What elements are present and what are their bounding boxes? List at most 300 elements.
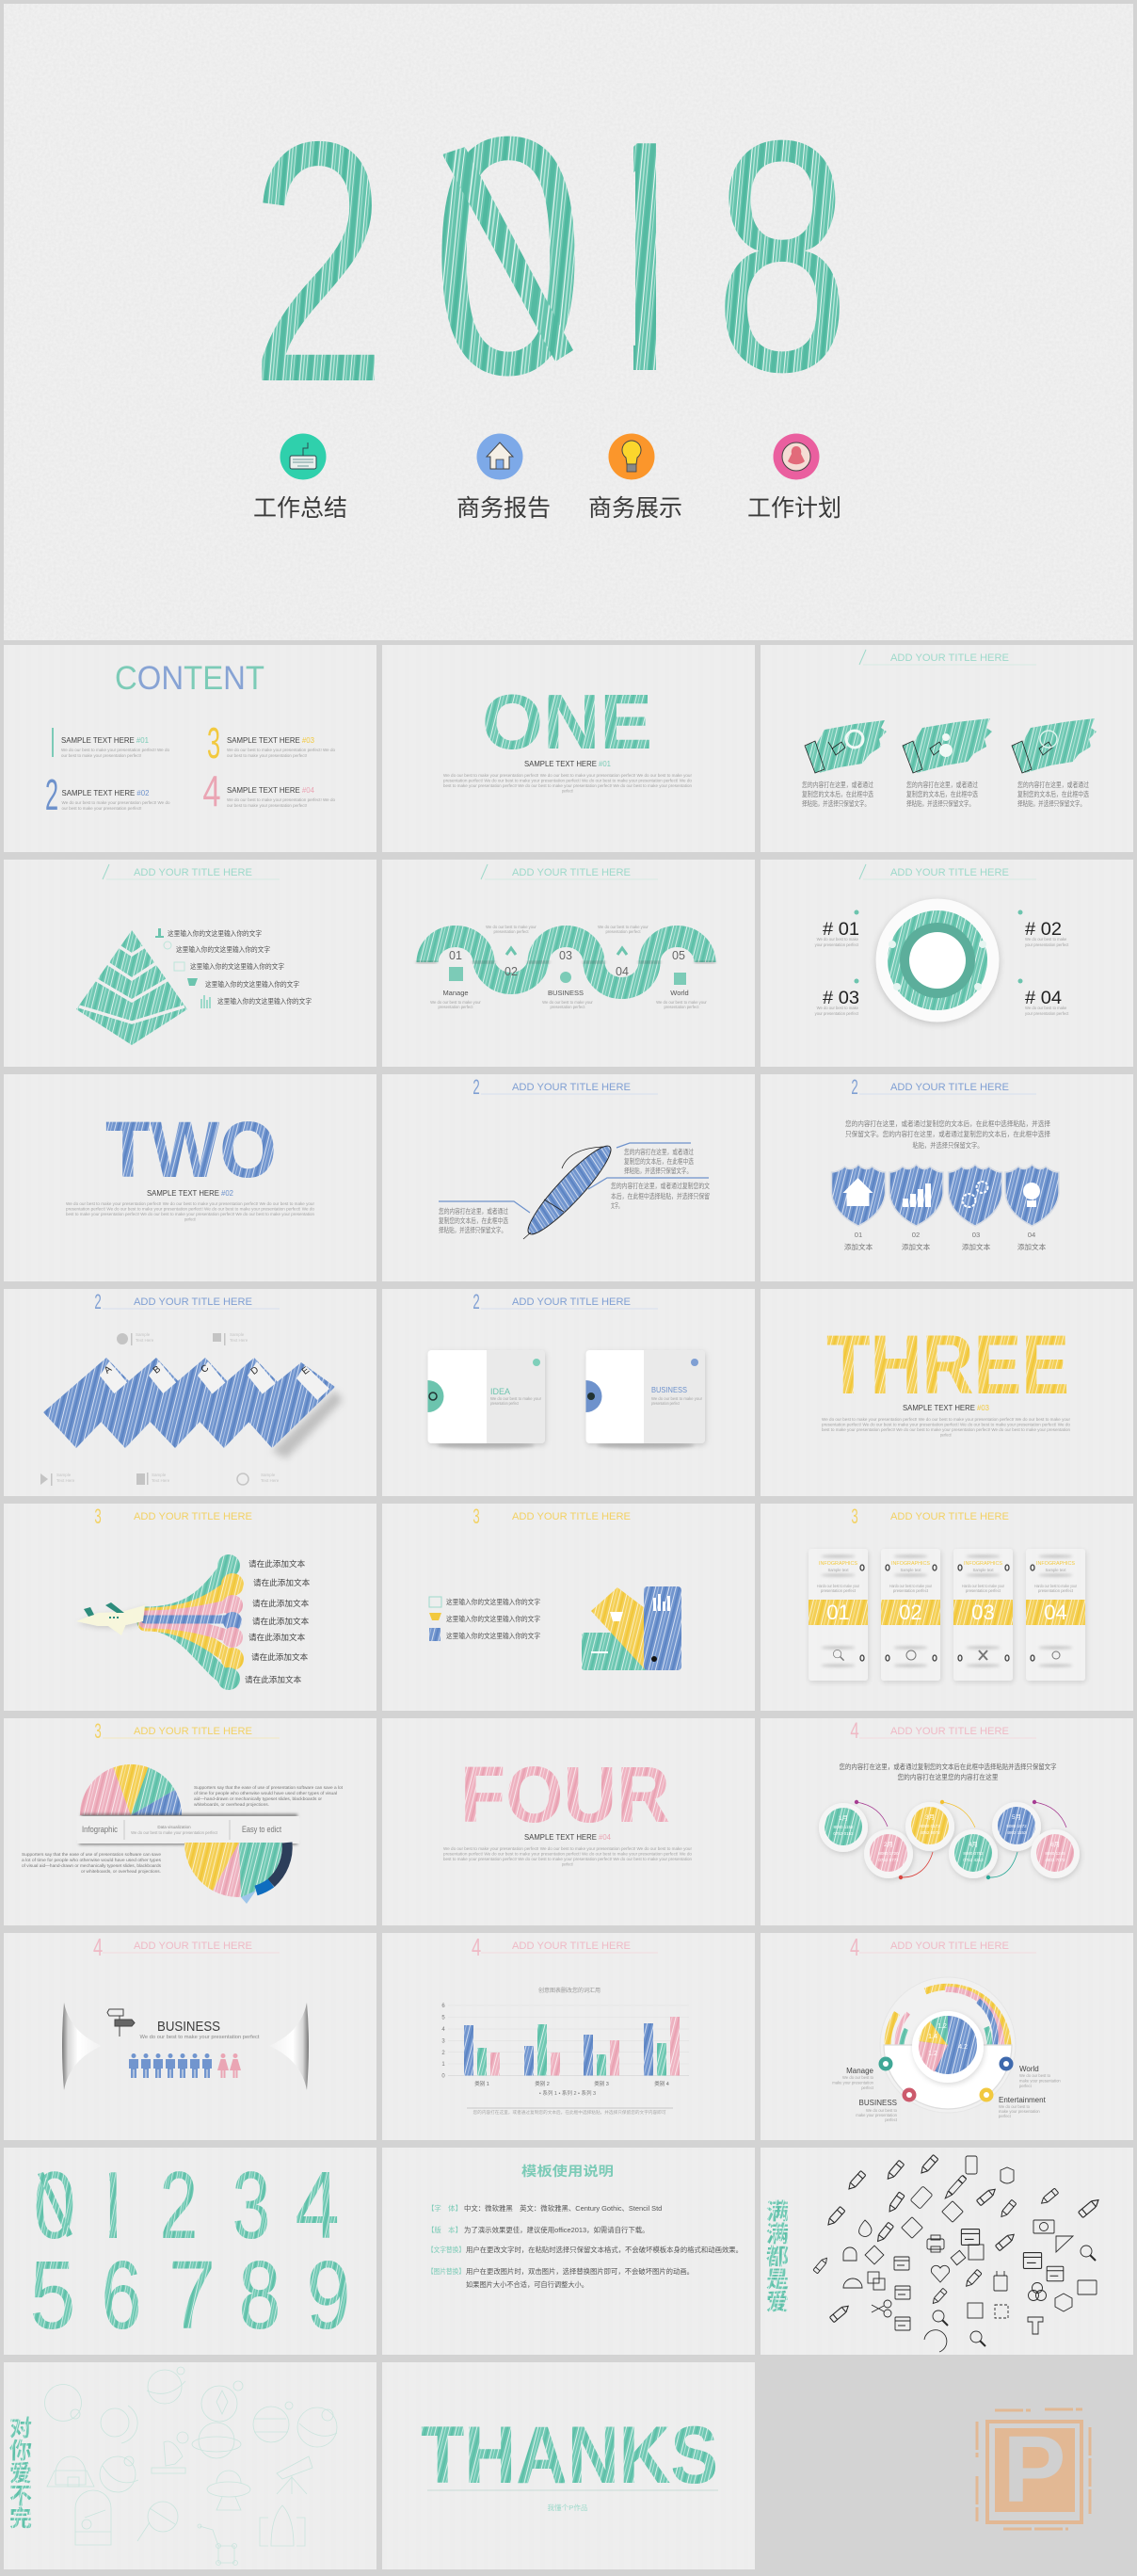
vertical slogan: 你 [9,2439,32,2464]
grid and axis labels: 5 [441,2015,445,2021]
circle: 3月: 4052 0072 [920,1830,940,1835]
item 02: We do our best to make your presentation perfect! We do [62,800,170,805]
outer halo [880,1977,1016,2113]
diamond D: D [249,1365,261,1377]
circle: 2月: 0752 5772 [878,1858,899,1862]
bottom text [22,1852,162,1875]
item #01: # 01 [823,920,859,940]
header [850,1718,1036,1744]
digits row 2: 6 [102,2242,141,2350]
line: 图片替换: 【图片替换】 [427,2267,465,2276]
header: ADD YOUR TITLE HERE [890,1511,1009,1522]
panel: section TWO [4,1074,376,1281]
text column 3 [1017,781,1089,808]
callout text middle: 文字。 [611,1201,622,1210]
bottom half plate [884,2045,1012,2109]
pyramid labels [168,928,312,1006]
text column 1: 复制您的文本后，在此框中选 [802,790,873,798]
column 04 [1026,1549,1085,1681]
header: ADD YOUR TITLE HERE [134,867,252,878]
card: BUSINESS [585,1350,705,1449]
grid and axis labels: 4 [441,2027,445,2033]
category labels: 类别 2 [535,2080,550,2087]
item 02: 2 [45,770,58,819]
fan labels [245,1558,311,1684]
panel: pen callouts [382,1074,755,1281]
label BUSINESS [856,2099,898,2122]
header [103,864,280,879]
binder rings [860,1565,1034,1661]
shield labels: 03 [972,1231,980,1239]
small captions: We do our best to make your [656,1000,707,1005]
heading: THANKS: THANKS [421,2410,718,2501]
digits row 2: 7 [168,2241,216,2349]
header: ADD YOUR TITLE HERE [512,1296,631,1308]
panel: plane fan [4,1504,376,1711]
petal heads [217,1554,244,1690]
paragraph: perfect! [562,789,573,793]
label World: make your presentation [1019,2079,1061,2083]
panel: section FOUR [382,1718,755,1925]
item #02: your presentation perfect [1025,942,1069,947]
circle: 5月: 4802 1152 [1007,1830,1027,1835]
text column 2: 您的内容打在这里，或者通过 [906,781,978,789]
item #03: # 03 [823,989,859,1008]
callout text middle: 您的内容打在这里，或者通过复制您的文 [611,1182,710,1190]
shield 1 house [832,1165,885,1226]
circle: 4月 [949,1829,998,1878]
intro paragraph: 只保留文字。您的内容打在这里，或者通过复制您的文本后，在此框中选择 [845,1130,1051,1138]
diamond shadow [272,1391,343,1458]
diamond A: A [103,1364,114,1377]
callout lines [439,1143,709,1213]
label Entertainment: Entertainment [999,2096,1047,2104]
header [859,650,1036,665]
step labels: Manage [442,989,469,997]
paragraph [66,1201,315,1222]
panel: infographic columns [761,1504,1133,1711]
header [481,864,658,879]
callout text middle [611,1182,710,1210]
intro text [840,1762,1057,1781]
column 02: INFOGRAPHICS [891,1561,931,1567]
line: 版本: 为了演示效果更佳，建议使用office2013，如需请自行下载。 [464,2226,649,2234]
small captions [430,925,707,1009]
bottom gray labels: Text Here [261,1478,280,1483]
label Entertainment [999,2096,1047,2118]
panel: wave flow [382,860,755,1067]
column 01: presentation perfect [821,1588,857,1593]
header: ADD YOUR TITLE HERE [890,1940,1009,1952]
panel: digits [4,2148,376,2355]
digits row 1 [36,2171,337,2239]
paragraph: best to make your presentation perfect! We do our best to make your presentation perfect! We do our best to make your presentation [443,1857,693,1861]
callout text top: 择粘贴，并选择只保留文字。 [624,1167,692,1175]
step numbers: 01 [449,949,462,962]
paragraph [443,773,693,793]
digits row 1: 4 [295,2152,340,2259]
icon: house [476,433,523,480]
small captions: We do our best to make your [430,1000,481,1005]
center strip: Data visualization [157,1825,191,1829]
circle: 3月: 3月 [925,1813,935,1821]
digits row 2: 5 [30,2241,75,2350]
top half pie [80,1764,182,1815]
tool icon cloud [813,2155,1100,2352]
grid and axis labels: 0 [441,2073,445,2079]
ring [875,898,1000,1023]
top gray labels: Sample [230,1332,245,1337]
pyramid labels: 这里输入你的文这里输入你的文字 [168,928,262,938]
label Manage: perfect [861,2085,874,2090]
circle: 2月 [864,1829,913,1878]
item 03 [207,718,336,767]
people blue [129,2053,212,2078]
intro text: 您的内容打在这里您的内容打在这里 [898,1772,999,1781]
panel: ring diagram [761,860,1133,1067]
line: 文字替换: 【文字替换】 [427,2246,465,2254]
column 04: INFOGRAPHICS [1036,1561,1076,1567]
pen illustration [520,1138,618,1242]
header: ADD YOUR TITLE HERE [134,1296,252,1308]
item #04 [1018,979,1069,1016]
fan labels: 请在此添加文本 [251,1651,309,1662]
intro paragraph: 粘贴，并选择只保留文字。 [913,1141,983,1150]
text column 2: 复制您的文本后，在此框中选 [906,790,978,798]
step labels: BUSINESS [548,989,584,997]
logo: P stamp: P [1003,2417,1065,2522]
line: 字体: 【字 体】 [427,2204,462,2213]
circle: 5月 [992,1802,1041,1851]
grid and axis labels: 6 [441,2004,445,2009]
bottom gray labels: Sample [152,1473,167,1477]
vertical slogan: 爱 [766,2290,789,2315]
top text: whiteboards, or overhead projections. [194,1802,269,1808]
small captions: We do our best to make your [486,925,536,929]
item 01: We do our best to make your presentation perfect! We do [61,748,170,752]
category labels: 类别 3 [594,2080,609,2087]
paragraph [443,1846,693,1866]
panel: section THREE [761,1289,1133,1496]
center pie: 1.2 [937,2023,947,2030]
callout text middle: 本后，在此框中选择粘贴，并选择只保留 [611,1192,710,1200]
heading: CONTENT: CONTENT [115,660,264,697]
digits row 2 [30,2240,350,2350]
pyramid labels: 这里输入你的文这里输入你的文字 [190,961,284,971]
text column 1: 您的内容打在这里，或者通过 [802,781,873,789]
text column 1: 择粘贴，并选择只保留文字。 [802,799,870,808]
top text: Supporters say that the ease of use of presentation software can save a lot [194,1785,344,1791]
footnote rule [467,2107,673,2109]
header: ADD YOUR TITLE HERE [890,1082,1009,1093]
header: 3 [94,1720,102,1743]
bars group 3 [584,2035,619,2075]
step numbers: 04 [616,965,629,978]
header: 2 [472,1076,480,1099]
diamond E: E [300,1365,312,1377]
header: ADD YOUR TITLE HERE [512,1511,631,1522]
bottom text: Supporters say that the ease of use of presentation software can save [22,1852,161,1858]
fan labels: 请在此添加文本 [248,1558,306,1569]
item 01: our best to make your presentation perfect! [61,753,141,758]
line: 图片替换 [427,2267,694,2289]
title: 2018 hatched year: 0 [431,66,585,445]
shield labels: 01 [855,1231,862,1239]
item 04: We do our best to make your presentation perfect! We do [227,797,336,802]
callout text bottom: 复制您的文本后，在此框中选 [439,1216,508,1225]
column 01: 01 [826,1601,850,1624]
center pie: 1.4 [928,2034,937,2040]
heading: BUSINESS [157,2019,220,2035]
line: 版本: 【版 本】 [427,2226,462,2234]
label Manage: Manage [846,2067,874,2075]
paragraph: perfect! [562,1862,573,1866]
column 03: presentation perfect [966,1588,1001,1593]
column 01: INFOGRAPHICS [819,1561,858,1567]
item 02 [45,770,170,819]
shield labels: 添加文本 [844,1242,873,1251]
bars group 4 [644,2017,680,2075]
diamond C [141,1358,232,1448]
center pie: 1.2 [928,2051,937,2057]
text column 3: 复制您的文本后，在此框中选 [1017,790,1089,798]
yellow card [591,1587,645,1669]
header [472,1076,658,1099]
shield 4 bulb [1005,1165,1059,1226]
digits row 1: 0 [34,2152,75,2259]
item 01: SAMPLE TEXT HERE #01 [61,736,150,745]
chart title: 创意图表删改您的词汇用 [538,1987,601,1994]
text column 2 [906,781,978,808]
diamond B [92,1358,184,1448]
item 04 [202,766,336,815]
pyramid icons [155,928,210,1008]
step numbers: 05 [672,949,685,962]
subtitle: SAMPLE TEXT HERE #02 [147,1189,234,1198]
label BUSINESS: perfect [885,2117,898,2122]
bottom text: of visual aid—hand-drawn or mechanically typeset slides, blackboards [22,1863,162,1869]
header: 2 [472,1291,480,1313]
icon: light bulb [608,433,655,480]
item #03 [815,979,859,1016]
digits row 1: 1 [92,2151,132,2258]
center strip: Easy to edict [242,1825,281,1834]
bottom text: a lot of time for people who otherwise would have used other types [22,1858,162,1863]
item 03: our best to make your presentation perfect! [227,753,307,758]
grid and axis labels: 1 [441,2062,445,2068]
top gray labels: Text Here [230,1338,248,1343]
column 03: Hardo our best to make your [962,1584,1005,1588]
bars group 1 [464,2025,500,2075]
label Manage [832,2067,874,2090]
title: 2018 hatched year [262,136,840,380]
panel: section ONE [382,645,755,852]
panel: cards list [382,1504,755,1711]
pyramid labels: 这里输入你的文这里输入你的文字 [205,979,299,989]
digits row 1: 2 [160,2151,198,2259]
bottom gray labels: Text Here [56,1478,75,1483]
card: IDEA: presentation perfect [490,1401,520,1406]
column 02: Sample text [900,1568,921,1572]
item #04: your presentation perfect [1025,1011,1069,1016]
intro paragraph: 您的内容打在这里，或者通过复制您的文本后，在此框中选择粘贴，并选择 [845,1119,1051,1128]
label Entertainment: We do our best to [999,2104,1031,2109]
paragraph: perfect! [184,1216,196,1222]
paragraph: presentation perfect! We do our best to make your presentation perfect! We do our best to make your presentation perfect! We do [822,1422,1071,1427]
category labels [474,2080,669,2087]
paragraph: best to make your presentation perfect! We do our best to make your presentation perfect! We do our best to make your presentation [822,1427,1071,1432]
category labels: 类别 4 [654,2080,669,2087]
item #01 [815,910,859,947]
paragraph: We do our best to make your presentation perfect! We do our best to make your presentation perfect! We do our best to make your [443,1846,693,1851]
top text [194,1785,344,1808]
vertical slogan: 对 [9,2416,32,2441]
header: 2 [94,1291,102,1313]
heading: TWO: TWO [105,1105,277,1194]
center strip: We do our best to make your presentation perfect [131,1830,218,1835]
item 01 [52,728,170,758]
step numbers: 03 [559,949,572,962]
bottom text: or whiteboards, or overhead projections. [81,1869,161,1875]
header: 3 [94,1505,102,1528]
vertical slogan: 不 [9,2484,32,2509]
label BUSINESS: make your presentation [856,2113,898,2117]
circle: 1月: 0752 0152 [833,1831,854,1836]
circle: 5月: 5月 [1012,1813,1021,1821]
column 04: Hardo our best to make your [1034,1584,1078,1588]
paragraph: presentation perfect! We do our best to make your presentation perfect! We do our best to make your presentation perfect! We do [66,1207,315,1211]
item #03: We do our best to make [817,1006,859,1010]
item 03: 3 [207,718,220,767]
panel: cover slide [4,4,1133,640]
step numbers: 02 [504,965,518,978]
circle: 1月: 1月 [839,1814,848,1822]
card: IDEA: IDEA [490,1387,510,1396]
bottom gray labels [40,1473,280,1486]
panel: space icons [4,2362,376,2569]
line: 字体: 中文：微软雅黑 英文：微软雅黑、Century Gothic、Stencil Std [464,2204,662,2213]
diamond B: B [152,1364,163,1377]
header [94,1505,252,1528]
digits row 1: 3 [232,2151,270,2259]
step labels: World [670,989,689,997]
circle: 3月: 8080 0172 [920,1824,940,1828]
header: ADD YOUR TITLE HERE [134,1511,252,1522]
circle: 6月 [1031,1829,1080,1878]
label World [1019,2065,1061,2088]
paragraph: best to make your presentation perfect! We do our best to make your presentation perfect! We do our best to make your presentation [443,783,693,788]
tagline: We do our best to make your presentation perfect [139,2035,260,2040]
panel: thanks [382,2362,755,2569]
callout text top: 您的内容打在这里，或者通过 [624,1148,694,1156]
circle: 4月: 0752 4212 [963,1858,984,1862]
step icons [449,967,686,985]
footnote: 您的内容打在这里，或者通过复制您的文本后，在此框中选择粘贴，并选择只保留您的文字内容即可 [472,2109,666,2116]
line: 图片替换: 用户在更改图片时，双击图片，选择替换图片即可，不会破坏图片的动画。 [466,2267,694,2276]
header: ADD YOUR TITLE HERE [890,867,1009,878]
heading: ONE: ONE [482,678,652,765]
pyramid labels: 这里输入你的文这里输入你的文字 [176,944,270,954]
small captions: presentation perfect [550,1005,585,1009]
title: 2018 hatched year: 1 [573,72,711,441]
text column 3: 择粘贴，并选择只保留文字。 [1017,799,1085,808]
circle: 5月: 8080 1572 [1006,1824,1027,1828]
icon: keyboard [280,433,326,480]
shield 3 gears [949,1165,1001,1226]
list: 这里输入你的文这里输入你的文字 [446,1614,540,1623]
vertical slogan: 是 [766,2267,789,2293]
bottom gray labels: Sample [56,1473,72,1477]
label Entertainment: make your presentation [999,2109,1040,2114]
header [850,1934,1036,1961]
digits row 2: 8 [239,2240,280,2349]
small captions: We do our best to make your [542,1000,593,1005]
circle: 1月 [819,1803,868,1852]
card: IDEA [427,1350,545,1449]
bottom half pie [184,1843,287,1904]
list icons [429,1597,441,1641]
small captions: presentation perfect [493,929,529,934]
heading: FOUR: FOUR [460,1750,670,1839]
circle: 6月: 6月 [1050,1841,1060,1848]
item #04: # 04 [1025,989,1062,1008]
paragraph: We do our best to make your presentation perfect! We do our best to make your presentation perfect! We do our best to make your [443,773,693,778]
item #02 [1018,910,1069,947]
header: ADD YOUR TITLE HERE [512,1940,631,1952]
card glyphs [591,1594,670,1662]
header: ADD YOUR TITLE HERE [134,1726,252,1737]
header: 3 [851,1505,858,1528]
paragraph: presentation perfect! We do our best to make your presentation perfect! We do our best to make your presentation perfect! We do [443,1851,693,1857]
column 02: 02 [899,1601,922,1624]
caption: 我懂个P作品 [547,2503,588,2512]
shield labels [844,1231,1047,1251]
category labels: 类别 1 [474,2080,489,2087]
panel: split pies [4,1718,376,1925]
node Manage [879,2056,892,2071]
digits row 2: 9 [307,2241,350,2349]
paragraph: best to make your presentation perfect! We do our best to make your presentation perfect! We do our best to make your presentation [66,1212,315,1216]
label: 工作总结: 工作总结 [253,495,347,522]
label BUSINESS: BUSINESS [859,2099,897,2107]
text column 3: 您的内容打在这里，或者通过 [1017,781,1089,789]
item #03: your presentation perfect [815,1011,859,1016]
grid and axis labels [441,2004,689,2079]
shield 2 chart [889,1165,943,1226]
vertical slogan: 都 [766,2245,789,2270]
circle: 4月: 4月 [969,1841,978,1848]
top gray labels: Text Here [136,1338,154,1343]
circle: 6月: 8080 1245 [1045,1851,1065,1856]
vertical slogan [766,2199,789,2315]
text column 1 [802,781,873,808]
airplane [76,1602,145,1635]
column 02: presentation perfect [893,1588,929,1593]
vertical slogan: 满 [766,2199,789,2225]
bars group 2 [524,2024,560,2075]
grid and axis labels: 3 [441,2039,445,2045]
column 04: 04 [1044,1601,1067,1624]
top text: aid—hand-drawn or mechanically typeset slides, blackboards or [194,1796,322,1802]
subtitle: SAMPLE TEXT HERE #03 [903,1404,990,1412]
panel: business people [4,1933,376,2140]
fan labels: 请在此添加文本 [252,1616,310,1626]
item 04: our best to make your presentation perfect! [227,803,307,808]
diamond A [43,1358,135,1448]
header [93,1934,280,1961]
teal card [582,1633,648,1670]
paragraph: perfect! [940,1433,952,1437]
